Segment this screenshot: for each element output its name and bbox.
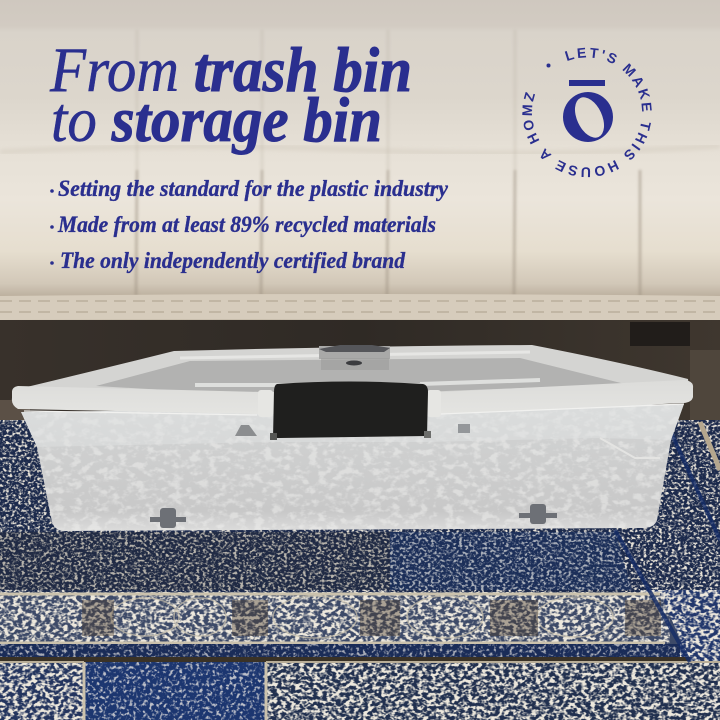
rug: bottom blocks	[0, 662, 85, 720]
rug: right diagonal line	[615, 530, 690, 662]
small clip right	[458, 424, 470, 433]
rug: ornate border band	[0, 592, 682, 644]
small clip left	[235, 425, 257, 436]
bullet 2: Made from at least 89% recycled materials	[57, 212, 436, 237]
bullet 3: The only independently certified brand	[60, 248, 405, 273]
logo: letter o	[563, 92, 613, 142]
title: to storage bin	[51, 84, 382, 155]
rug: right corner speckle	[640, 590, 720, 662]
lid rim	[12, 380, 693, 414]
bed hem	[0, 294, 720, 323]
background: floor under bed	[0, 320, 720, 425]
bullet list	[50, 176, 449, 273]
top clasp	[319, 345, 390, 370]
title	[49, 34, 412, 155]
rug: band speckle upper	[0, 420, 720, 592]
wheel left	[150, 508, 186, 528]
background: bed duvet	[0, 0, 720, 322]
logo: macron bar	[569, 80, 605, 86]
wheel right	[519, 504, 557, 524]
side clips of the handle	[258, 390, 273, 417]
black handle	[270, 382, 431, 440]
rug	[0, 420, 720, 720]
logo badge	[522, 48, 652, 178]
logo: dot separator	[546, 64, 550, 68]
logo: circular slogan: LET'S MAKE THIS HOUSE A HOMZ	[522, 48, 652, 178]
bin body	[21, 404, 684, 531]
storage bin	[12, 345, 693, 534]
bin lid top	[14, 345, 690, 395]
bullet 1: Setting the standard for the plastic industry	[58, 176, 449, 201]
title: From trash bin	[49, 34, 412, 105]
